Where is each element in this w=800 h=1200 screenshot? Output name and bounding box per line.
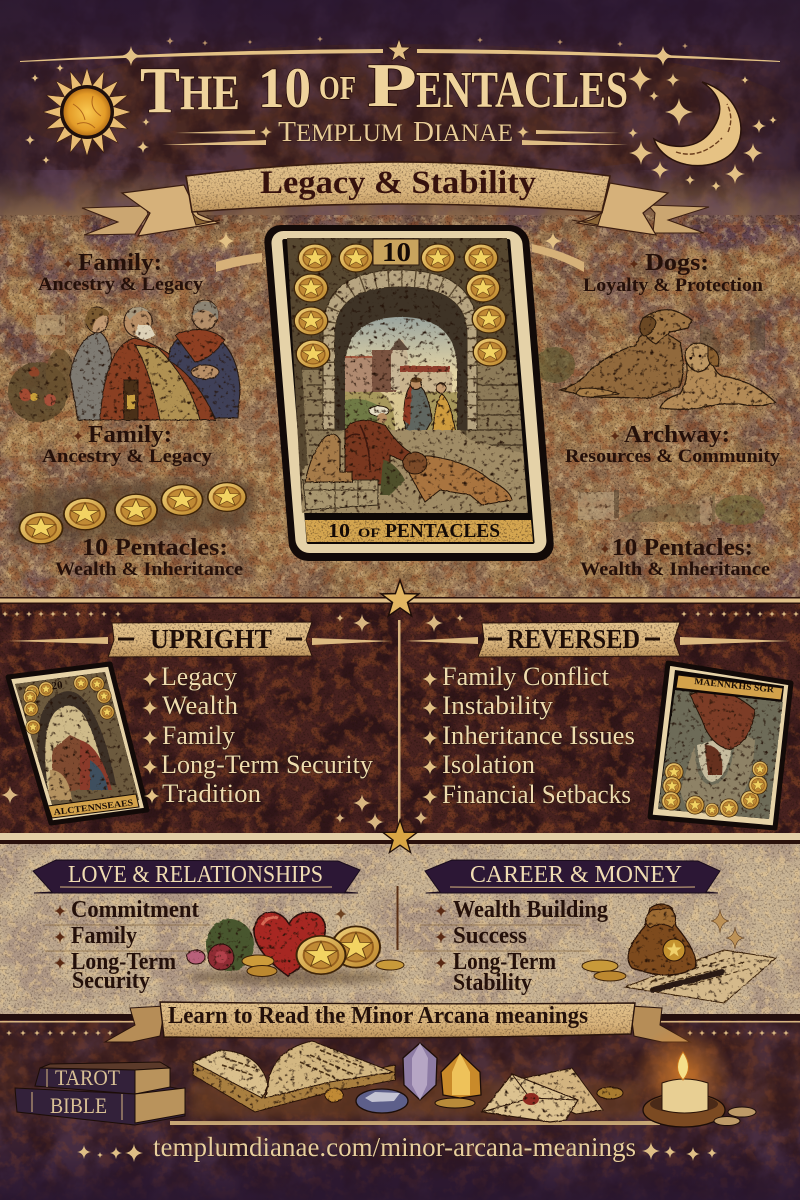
title: T (140, 54, 180, 127)
shelf line (170, 1082, 660, 1125)
label: family lower (42, 422, 213, 467)
label: dogs: Loyalty & Protection (583, 275, 763, 296)
illustration: heart and coins (185, 912, 404, 985)
label: archway: Archway: (624, 422, 730, 448)
list item: wealth: Wealth (162, 691, 238, 720)
upright small card (8, 664, 147, 823)
vertical panel divider (396, 886, 398, 950)
illustration: candle (633, 1025, 756, 1127)
item: long-term security: Security (72, 968, 150, 994)
icon: crescent moon (654, 82, 741, 166)
list item: legacy: Legacy (161, 662, 237, 691)
illustration: crystals (356, 1043, 481, 1113)
item: wealth building: Wealth Building (453, 897, 608, 923)
ribbon: learn to read: Learn to Read the Minor Arcana meanings (168, 1003, 588, 1029)
illustration: five pentacle coins (10, 480, 255, 545)
label: ten pentacles right: Wealth & Inheritance (580, 559, 770, 580)
book: tarot (35, 1062, 170, 1094)
item: long-term stability: Long-Term (453, 949, 556, 975)
central tarot card (263, 225, 555, 561)
illustration: faint village (578, 490, 765, 525)
title: HE (180, 64, 240, 120)
subtitle: IANAE (434, 120, 513, 147)
illustration: tarot and bible books (15, 1062, 185, 1125)
item: long-term stability: Stability (453, 970, 532, 996)
list item: family: Family (162, 721, 235, 750)
ribbon: legacy and stability (82, 162, 709, 236)
item: long-term stability (435, 949, 556, 996)
list: career and money (410, 897, 608, 996)
item: long-term security: Long-Term (71, 949, 176, 975)
list item: tradition: Tradition (162, 779, 261, 808)
title: 10 (258, 57, 311, 120)
label: family top: Family: (78, 250, 162, 276)
item: success: Success (453, 923, 527, 949)
decorative sparkles around moon and sun (25, 64, 777, 191)
ribbon: career and money (425, 860, 720, 893)
title: ENTACLES (416, 62, 628, 119)
label: dogs (583, 250, 763, 296)
label: archway (565, 422, 781, 467)
ribbon: learn to read (105, 1002, 690, 1042)
subtitle: EMPLUM (296, 120, 403, 147)
banner: reversed (405, 622, 790, 657)
item: family: Family (71, 923, 137, 949)
card name plate: OF (358, 525, 380, 540)
illustration: two dogs (535, 310, 775, 409)
title: P (367, 52, 417, 120)
background: light parchment lower panel (0, 840, 800, 1018)
label: archway: Resources & Community (565, 446, 781, 467)
card number plate: 10 (382, 237, 411, 267)
reversed small card: MAENNKHS SGR (694, 676, 775, 694)
label: family lower: Ancestry & Legacy (42, 446, 213, 467)
rule lines (45, 925, 210, 951)
label: ten pentacles left: 10 Pentacles: (82, 535, 228, 561)
card scene (287, 238, 528, 513)
list item: family conflict: Family Conflict (442, 662, 610, 691)
card name plate (305, 520, 533, 542)
book: tarot: TAROT (55, 1065, 120, 1090)
ribbon: love and relationships (33, 860, 360, 893)
label: ten pentacles left: Wealth & Inheritance (55, 559, 243, 580)
background: header texture (0, 0, 800, 240)
list item: instability: Instability (442, 691, 553, 720)
list item: financial setbacks: Financial Setbacks (442, 780, 631, 809)
list: love and relationships (45, 897, 210, 994)
vertical divider (398, 620, 400, 825)
illustration: envelope and letter (482, 1068, 623, 1122)
label: dogs: Dogs: (645, 250, 709, 276)
card coins (294, 244, 508, 368)
upright small card: ALCTENNSEAES (53, 797, 134, 817)
illustration: open book (193, 1041, 395, 1112)
banner: reversed: REVERSED (507, 624, 640, 654)
banner: upright (8, 622, 392, 657)
subtitle: T (278, 116, 296, 148)
label: ten pentacles right: 10 Pentacles: (612, 535, 753, 561)
card frame (263, 225, 555, 561)
header ornament line with stars (20, 36, 780, 66)
ribbon: love and relationships: LOVE & RELATIONSHIPS (68, 862, 323, 888)
footer divider lines (0, 1014, 800, 1022)
subtitle (162, 116, 628, 148)
subtitle: D (413, 116, 434, 148)
footer dot rows (6, 1030, 789, 1036)
book: bible (15, 1087, 185, 1125)
label: family top (38, 250, 204, 295)
label: ten pentacles right (580, 535, 770, 580)
label: ten pentacles left (55, 535, 243, 580)
card number plate (373, 237, 419, 267)
book: bible: BIBLE (50, 1093, 107, 1118)
lower divider with star (0, 818, 800, 854)
item: long-term security (54, 949, 176, 994)
banner: upright: UPRIGHT (150, 624, 272, 654)
illustration: family group (8, 300, 240, 422)
label: family lower: Family: (88, 422, 172, 448)
ribbon: legacy and stability: Legacy & Stability (260, 165, 537, 201)
label: family top: Ancestry & Legacy (38, 274, 204, 295)
url text: templumdianae.com/minor-arcana-meanings (153, 1132, 636, 1162)
background: dark upright and reversed panel (0, 604, 800, 836)
list item: inheritance issues: Inheritance Issues (442, 721, 635, 750)
upright small card: 20 (51, 679, 64, 692)
right panel labels and illustration (532, 232, 781, 580)
dot rows under divider (1, 611, 799, 831)
reversed small card (650, 663, 791, 828)
illustration: money bag and scroll (335, 904, 776, 1003)
background: dark footer (0, 1018, 800, 1200)
card name plate: 10 (328, 520, 350, 542)
upper divider with star (0, 578, 800, 618)
title: OF (319, 70, 356, 107)
rule lines (410, 925, 590, 951)
background: parchment middle section (0, 170, 800, 600)
list item: isolation: Isolation (442, 750, 535, 779)
card name plate: PENTACLES (385, 520, 500, 542)
icon: sun (43, 68, 131, 156)
list item: long-term security: Long-Term Security (161, 750, 373, 779)
item: commitment: Commitment (71, 897, 199, 923)
upright list (142, 662, 373, 808)
reversed list (422, 662, 635, 809)
left panel labels and illustration (8, 232, 262, 580)
ribbon: career and money: CAREER & MONEY (470, 862, 682, 888)
